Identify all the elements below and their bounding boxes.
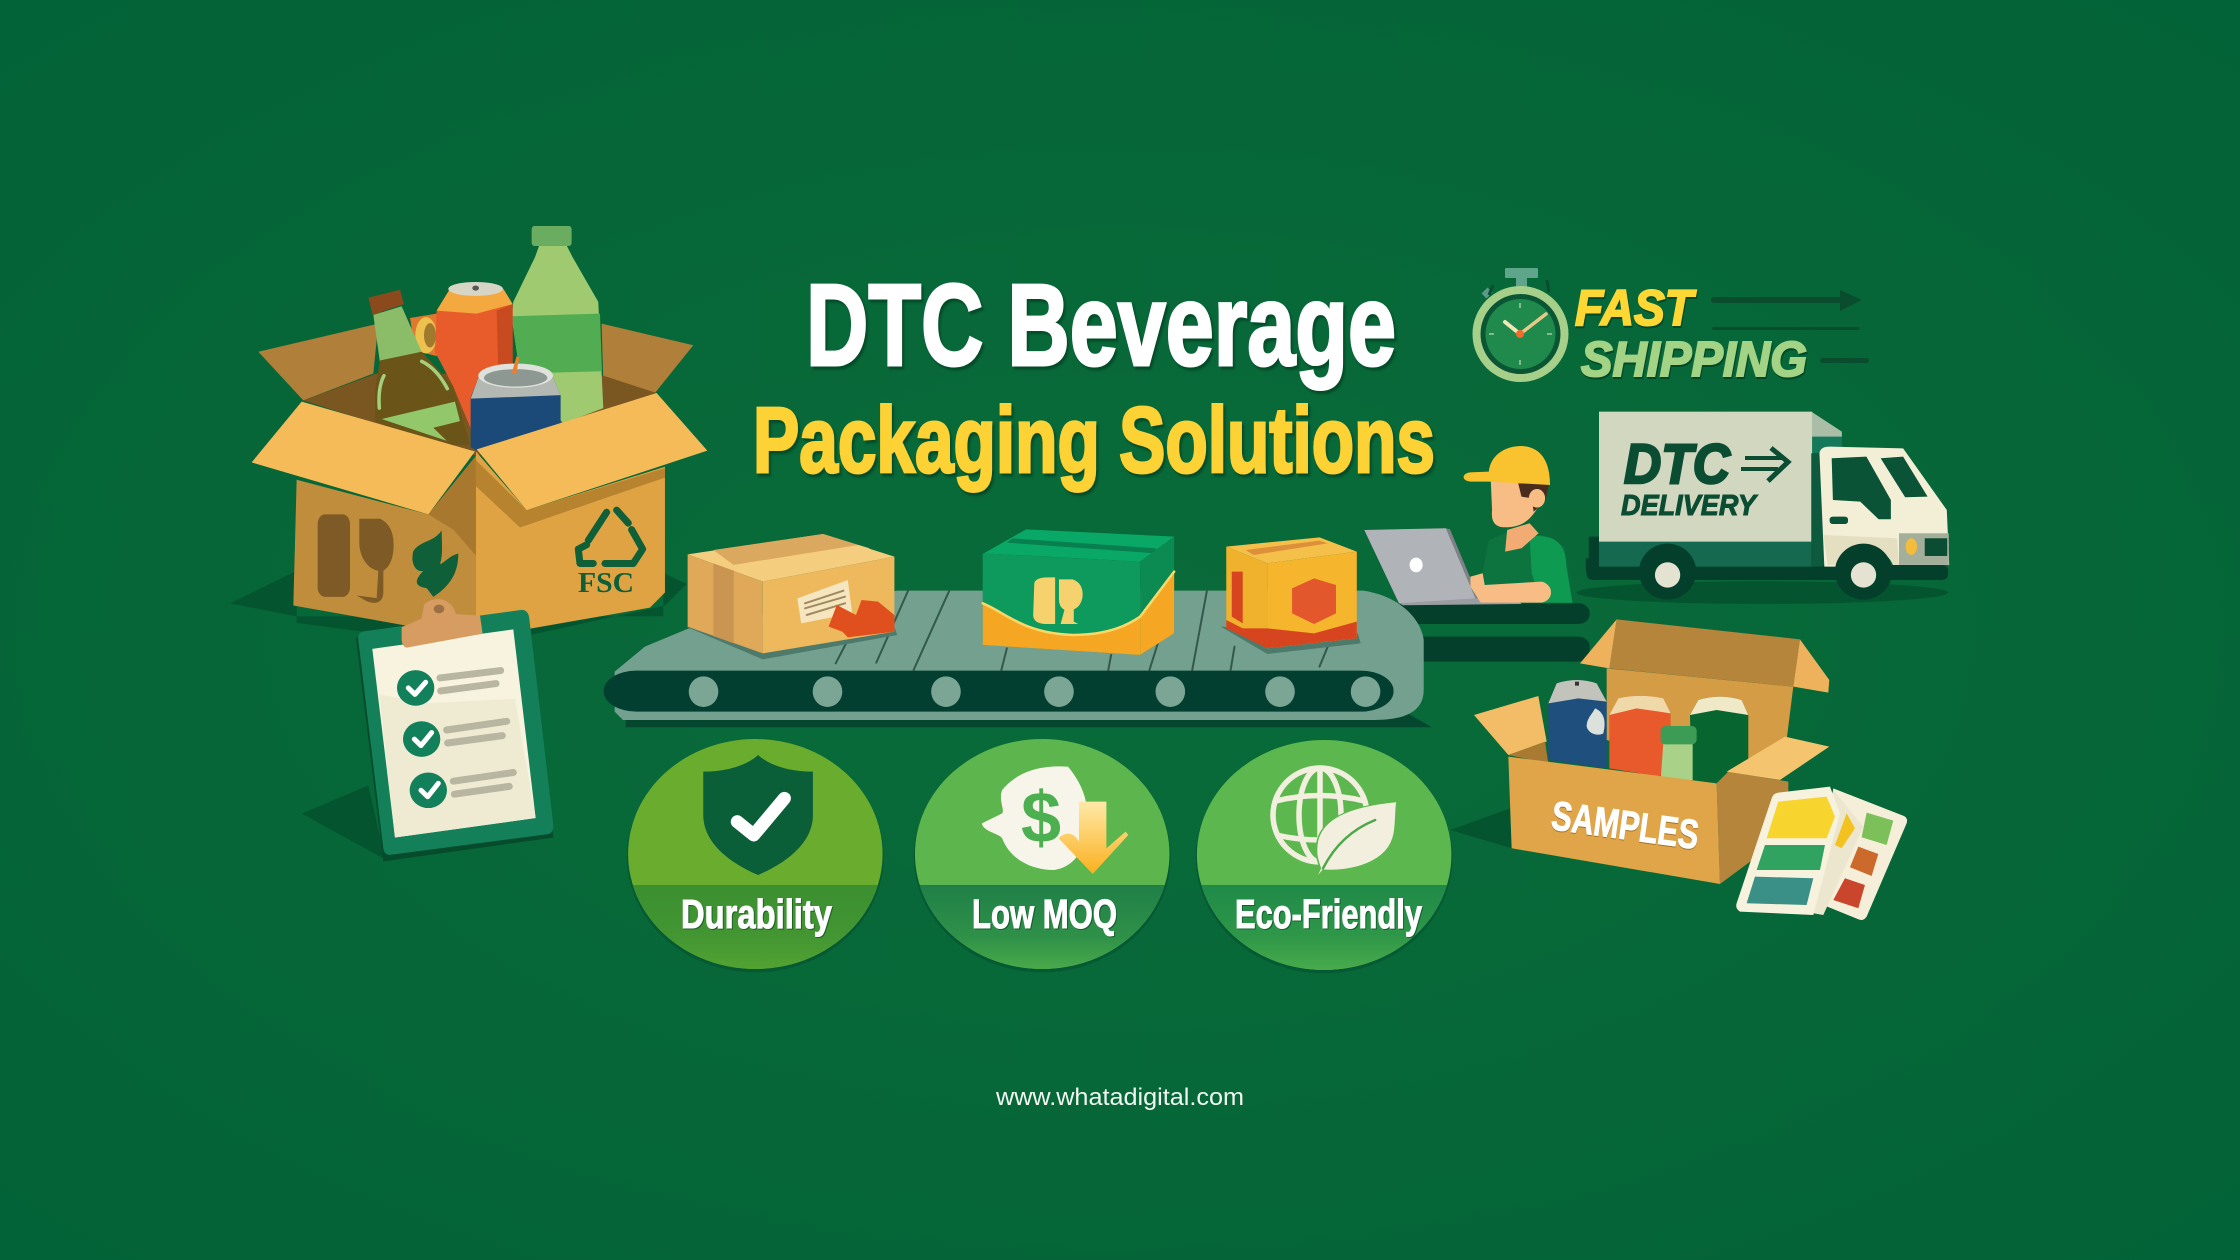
back flap — [1609, 619, 1800, 687]
conveyor belt with packages — [604, 529, 1432, 727]
box back flaps — [258, 324, 693, 400]
shipping label: SHIPPING — [1581, 333, 1807, 387]
laptop — [1364, 528, 1521, 605]
leaf icon — [1315, 802, 1397, 880]
truck grille and headlight — [1899, 533, 1949, 565]
worker neck — [1505, 523, 1539, 552]
samples box shadow — [1450, 808, 1512, 848]
front wheel — [1835, 544, 1892, 600]
speed line — [1712, 327, 1860, 330]
dollar sign: $ — [1021, 778, 1061, 858]
globe icon — [1273, 768, 1367, 862]
eco-friendly label: Eco-Friendly — [1235, 891, 1422, 937]
illustration: samples box — [1450, 619, 1907, 920]
blue can — [471, 356, 561, 451]
back swatch card — [1815, 788, 1907, 920]
benefit badge: low MOQ — [912, 739, 1175, 972]
leaf icon — [412, 530, 458, 597]
cab windows — [1832, 457, 1928, 519]
box interior — [303, 373, 657, 456]
truck ground shadow — [1577, 581, 1948, 604]
illustration: delivery truck — [1577, 412, 1949, 604]
durability label: Durability — [681, 891, 832, 937]
belt surface — [615, 591, 1424, 720]
box front flaps — [252, 393, 707, 514]
clipboard — [356, 599, 553, 861]
box ground shadow — [230, 571, 687, 647]
worker arm — [1470, 573, 1551, 603]
cargo box side — [1811, 412, 1842, 453]
rollers — [689, 676, 1380, 707]
worker head — [1491, 482, 1542, 527]
cargo box — [1599, 412, 1812, 542]
green bottle — [512, 226, 603, 423]
front face — [1508, 757, 1720, 884]
yellow and red package — [1221, 537, 1361, 654]
worker hair — [1518, 483, 1549, 512]
illustration: delivery worker at laptop — [1364, 446, 1590, 662]
shield icon — [703, 755, 813, 875]
illustration: open box with beverages — [230, 226, 707, 861]
clipboard clip — [402, 599, 483, 648]
blue can — [1548, 680, 1607, 768]
checklist item two — [403, 721, 507, 757]
box left side — [293, 456, 476, 638]
checklist item one — [397, 670, 501, 706]
speed arrow — [1711, 290, 1862, 311]
samples label: SAMPLES — [1549, 792, 1702, 858]
box right side — [476, 452, 665, 638]
rear wheel — [1639, 544, 1696, 600]
conveyor shadow — [626, 713, 1432, 727]
truck label DTC: DTC — [1624, 432, 1731, 495]
checklist item three — [410, 772, 513, 808]
cardboard package — [686, 534, 897, 659]
middle swatch card — [1813, 790, 1863, 915]
green can — [1690, 697, 1748, 783]
benefit badge: eco-friendly — [1194, 740, 1457, 973]
door handle — [1830, 517, 1848, 524]
worker body — [1477, 533, 1572, 603]
speed dash — [1820, 358, 1869, 363]
desk bars — [1391, 603, 1590, 662]
down arrow icon — [1059, 802, 1128, 874]
right flap and side — [1717, 772, 1788, 884]
money bag icon — [982, 766, 1087, 870]
orange item behind — [410, 314, 437, 356]
green and orange package — [983, 529, 1174, 655]
front swatch card — [1736, 787, 1840, 915]
title — [753, 260, 1435, 492]
red can — [1609, 696, 1671, 777]
title line one: DTC Beverage — [806, 260, 1396, 390]
truck label arrow icon — [1741, 448, 1788, 481]
website url: www.whatadigital.com — [995, 1084, 1244, 1111]
stopwatch — [1472, 268, 1568, 382]
clipboard shadow — [302, 785, 385, 859]
FSC label: FSC — [578, 568, 634, 599]
truck cab — [1819, 447, 1949, 567]
recycling symbol — [578, 510, 643, 563]
worker cap — [1464, 446, 1550, 485]
dark glass bottle — [368, 290, 470, 445]
low MOQ label: Low MOQ — [972, 891, 1117, 937]
fast label: FAST — [1575, 280, 1697, 336]
truck label DELIVERY: DELIVERY — [1621, 490, 1758, 522]
back flap sides — [1580, 619, 1829, 693]
cargo lower band — [1599, 542, 1812, 567]
title line two: Packaging Solutions — [753, 388, 1435, 492]
back panel — [1607, 668, 1793, 772]
red can — [435, 282, 513, 443]
infographic canvas — [230, 226, 1950, 1110]
left flap — [1474, 696, 1547, 755]
small bottle — [1661, 726, 1697, 780]
benefit badge: durability — [626, 739, 884, 972]
fast shipping badge — [1472, 268, 1869, 387]
belt slats — [836, 590, 1330, 670]
check mark — [737, 798, 784, 835]
dark belt band — [604, 671, 1394, 712]
fragile glass icon — [318, 514, 394, 603]
truck chassis — [1586, 537, 1948, 580]
